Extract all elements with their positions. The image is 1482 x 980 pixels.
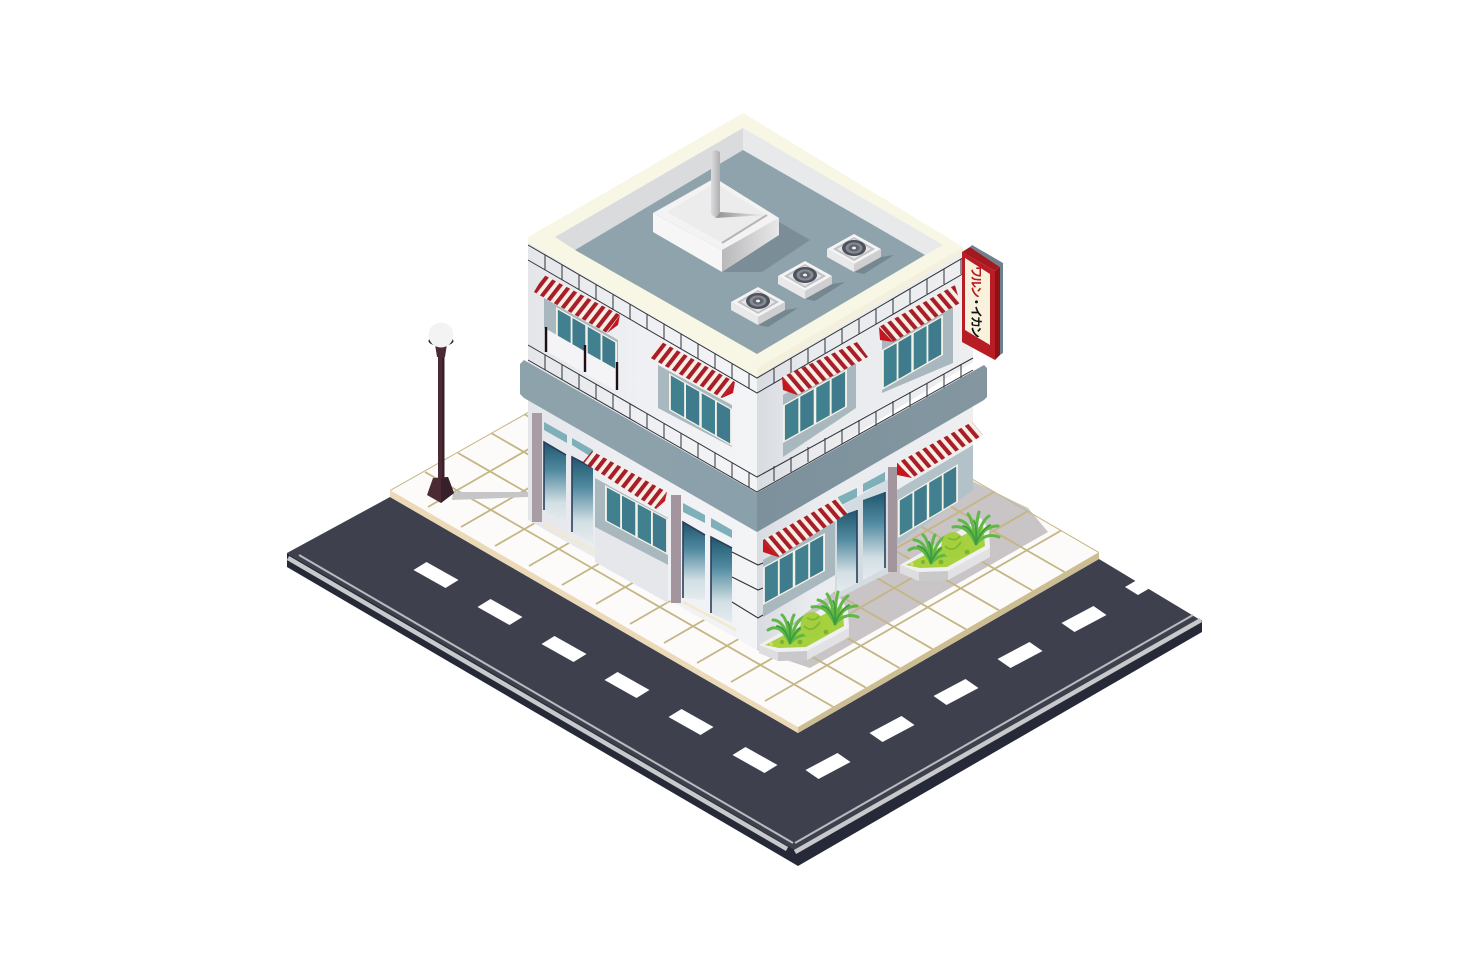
upper left second window xyxy=(658,365,732,447)
lane dashes: left road xyxy=(414,562,778,773)
upper right second window xyxy=(882,293,953,393)
flat roof xyxy=(528,113,963,377)
air conditioning units xyxy=(731,234,894,327)
vent box xyxy=(653,150,810,272)
left pillars xyxy=(532,413,681,603)
lower left window recess xyxy=(595,478,668,565)
road xyxy=(287,497,1202,866)
curb lines xyxy=(288,555,1201,852)
left door group two xyxy=(683,503,732,623)
isometric illustration: shop on a street corner xyxy=(287,113,1202,866)
planter front xyxy=(759,592,858,661)
lower right window recess xyxy=(763,520,835,617)
floor trim xyxy=(544,524,888,630)
upper right window xyxy=(783,353,856,457)
right pillar xyxy=(888,467,897,572)
sidewalk xyxy=(390,412,1099,733)
lower floor xyxy=(528,395,973,650)
awnings xyxy=(534,275,983,557)
lane dashes: right road xyxy=(806,580,1150,779)
street lamp xyxy=(427,322,454,503)
left door group one xyxy=(544,422,593,543)
hanging shop sign: ワルン ・イカン xyxy=(969,266,983,338)
building shadow on pavement xyxy=(757,480,1048,668)
brick courses xyxy=(528,245,973,492)
corner wall lines xyxy=(732,552,763,618)
lower right second window recess xyxy=(897,445,973,545)
right door group xyxy=(835,472,890,600)
building xyxy=(520,113,1003,650)
lamp shadow xyxy=(452,492,528,500)
upper left window with white panels xyxy=(544,298,618,391)
planter rear xyxy=(900,512,999,581)
band between floors xyxy=(520,360,987,532)
upper floor xyxy=(528,240,973,495)
hanging shop sign xyxy=(962,245,1003,360)
